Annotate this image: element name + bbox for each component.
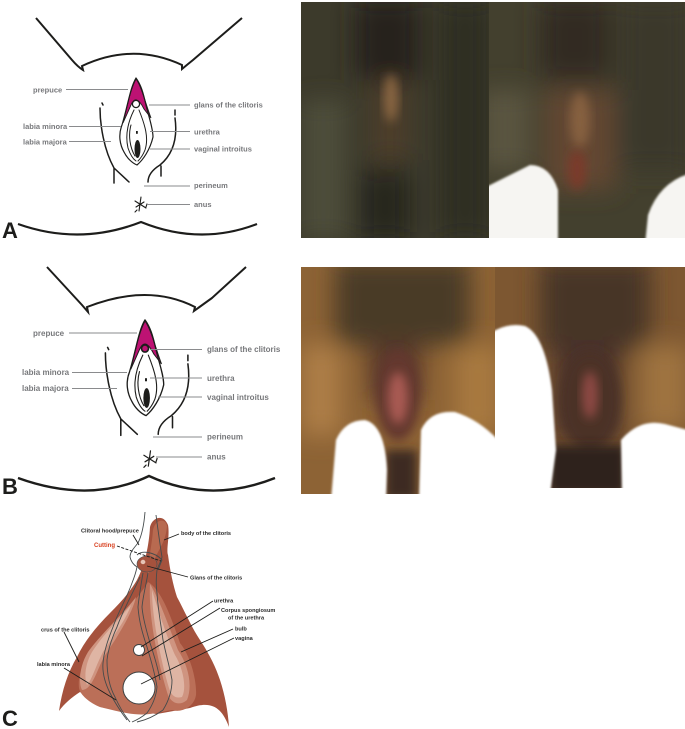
upper body contour	[36, 18, 242, 70]
diagram B: external anatomy with labels: vaginal introitus	[207, 393, 269, 402]
diagram C: internal clitoral anatomy: body of the clitoris	[181, 531, 231, 537]
labia minora and prepuce outlines	[103, 512, 145, 720]
lower body contour	[18, 222, 257, 235]
labels: Clitoral hood/prepuce	[81, 528, 139, 534]
leader lines	[69, 333, 202, 457]
inner folds	[135, 355, 157, 411]
glans of the clitoris	[141, 345, 149, 352]
diagram C: internal clitoral anatomy: urethra	[214, 598, 234, 604]
diagram C: internal clitoral anatomy: of the urethra	[228, 616, 265, 622]
labia majora contours	[100, 103, 176, 183]
diagram B: external anatomy with labels: anus	[207, 452, 226, 462]
diagram B: external anatomy with labels: urethra	[207, 374, 235, 383]
diagram A: external anatomy with labels: glans of the clitoris	[194, 100, 263, 110]
diagram A: external anatomy with labels: labia majora	[23, 138, 68, 146]
photo panel A right	[480, 0, 685, 245]
diagram B: external anatomy with labels: labia minora	[22, 368, 70, 377]
vaginal introitus	[143, 388, 150, 408]
urethra mark	[145, 378, 147, 381]
leader lines	[66, 90, 190, 204]
outer crura and body	[59, 518, 229, 727]
urethra mark	[136, 131, 138, 134]
diagram C: internal clitoral anatomy: Corpus spongiosum	[221, 608, 275, 614]
photo panel B right	[488, 260, 685, 495]
lower body contour	[18, 476, 275, 491]
urethra opening	[134, 644, 144, 656]
diagram B: external anatomy with labels	[18, 267, 281, 491]
photo panel A left	[301, 0, 490, 240]
cutting dashed line	[117, 546, 161, 561]
diagram A: external anatomy with labels	[18, 18, 263, 235]
vaginal introitus	[134, 140, 140, 158]
diagram C: internal clitoral anatomy: Glans of the clitoris	[190, 576, 242, 582]
diagram A: external anatomy with labels: anus	[194, 200, 212, 209]
diagram C: internal clitoral anatomy	[37, 512, 275, 727]
panel letter B: B	[2, 474, 18, 499]
diagram B: external anatomy with labels: glans of the clitoris	[207, 345, 281, 354]
labels: prepuce	[33, 329, 65, 338]
labia outline	[120, 78, 153, 165]
photo panel B left	[301, 260, 500, 500]
diagram C: internal clitoral anatomy: bulb	[235, 626, 247, 632]
diagram B: external anatomy with labels: perineum	[207, 432, 243, 442]
body of the clitoris highlight	[148, 521, 167, 575]
bulbs and medium tone	[79, 582, 196, 715]
prepuce in magenta	[123, 79, 151, 123]
labia majora contours	[105, 347, 189, 435]
diagram A: external anatomy with labels: perineum	[194, 181, 228, 190]
labels: prepuce	[33, 86, 62, 94]
diagram C: internal clitoral anatomy: Cutting	[94, 543, 115, 549]
vagina opening	[123, 672, 155, 704]
anus	[144, 451, 157, 467]
diagram A: external anatomy with labels: urethra	[194, 128, 221, 136]
diagram C: internal clitoral anatomy: vagina	[235, 636, 254, 642]
diagram C: internal clitoral anatomy: crus of the clitoris	[41, 628, 90, 634]
light highlight on the bulbs	[152, 590, 184, 698]
diagram A: external anatomy with labels: vaginal introitus	[194, 144, 252, 154]
prepuce in magenta	[131, 321, 162, 369]
mid highlight on the bulbs	[150, 584, 190, 703]
panel letter A: A	[2, 218, 18, 243]
leader lines	[64, 534, 234, 700]
upper body contour	[47, 267, 246, 312]
diagram C: internal clitoral anatomy: labia minora	[37, 662, 71, 668]
labia outline	[127, 320, 164, 416]
glans of the clitoris	[137, 556, 157, 572]
glans of the clitoris	[132, 100, 140, 108]
diagram B: external anatomy with labels: labia majora	[22, 384, 69, 393]
diagram A: external anatomy with labels: labia minora	[23, 122, 68, 131]
anus	[135, 197, 147, 212]
inner folds	[127, 110, 147, 161]
